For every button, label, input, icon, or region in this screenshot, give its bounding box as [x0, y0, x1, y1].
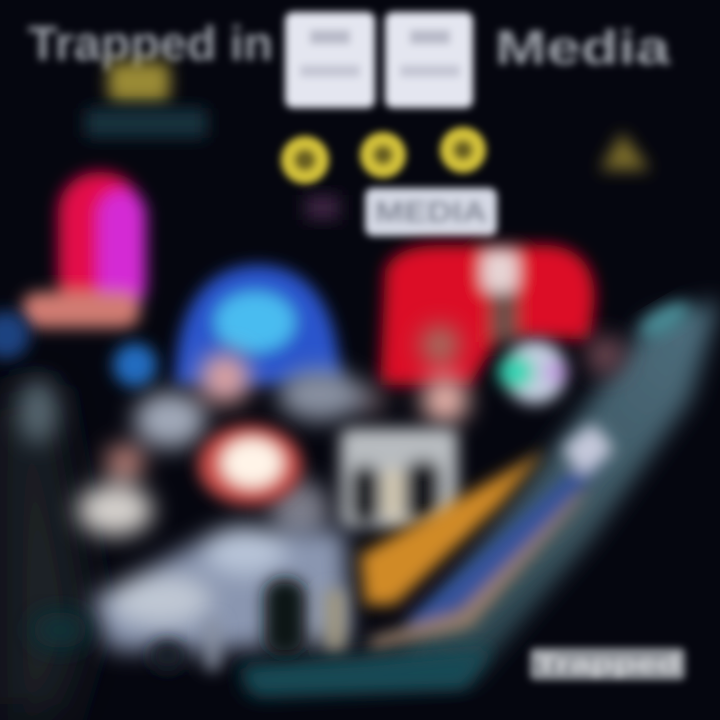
icon: yellow ring 1: [281, 136, 329, 184]
grey clusters: [18, 369, 362, 540]
orange stripe: [360, 450, 545, 605]
tan stripe: [370, 490, 590, 650]
title: [28, 12, 670, 108]
phone body shadow: [0, 380, 90, 720]
pink capsule: [22, 172, 146, 328]
figure heads: [199, 325, 625, 424]
left teal base: [32, 612, 88, 648]
white block with dark columns: [340, 428, 458, 528]
icon: yellow badge: [108, 62, 170, 102]
white label pill: MEDIA: [375, 196, 487, 229]
lower figure panel: [90, 526, 350, 650]
subtitle bar: [85, 108, 207, 138]
teal ball: [498, 340, 568, 404]
phone screen stripes: [360, 422, 616, 650]
blue dome: [175, 265, 340, 385]
white screen corner: [560, 422, 616, 476]
small label: [305, 195, 340, 220]
rating icons: [281, 127, 486, 184]
icon: small yellow triangle: [600, 132, 650, 170]
icon: yellow ring 2: [360, 132, 406, 178]
blue stripe: [405, 455, 605, 630]
red shape: [380, 245, 595, 385]
white label pill: [365, 188, 497, 236]
title word: Trapped in: Trapped in: [28, 18, 273, 71]
footer label: [530, 648, 685, 680]
icon: yellow ring 3: [440, 127, 486, 173]
teal base: [240, 650, 490, 694]
central figures: [18, 325, 625, 540]
white glowing blob: [198, 425, 302, 505]
title word: Media: Media: [495, 22, 670, 75]
lower dark columns: [150, 578, 345, 672]
phone edge: [240, 300, 720, 695]
blue side blobs: [0, 311, 157, 387]
phone top reflection: [635, 296, 695, 344]
footer label: Trapped: [535, 651, 680, 678]
title highlight block: [285, 12, 473, 108]
